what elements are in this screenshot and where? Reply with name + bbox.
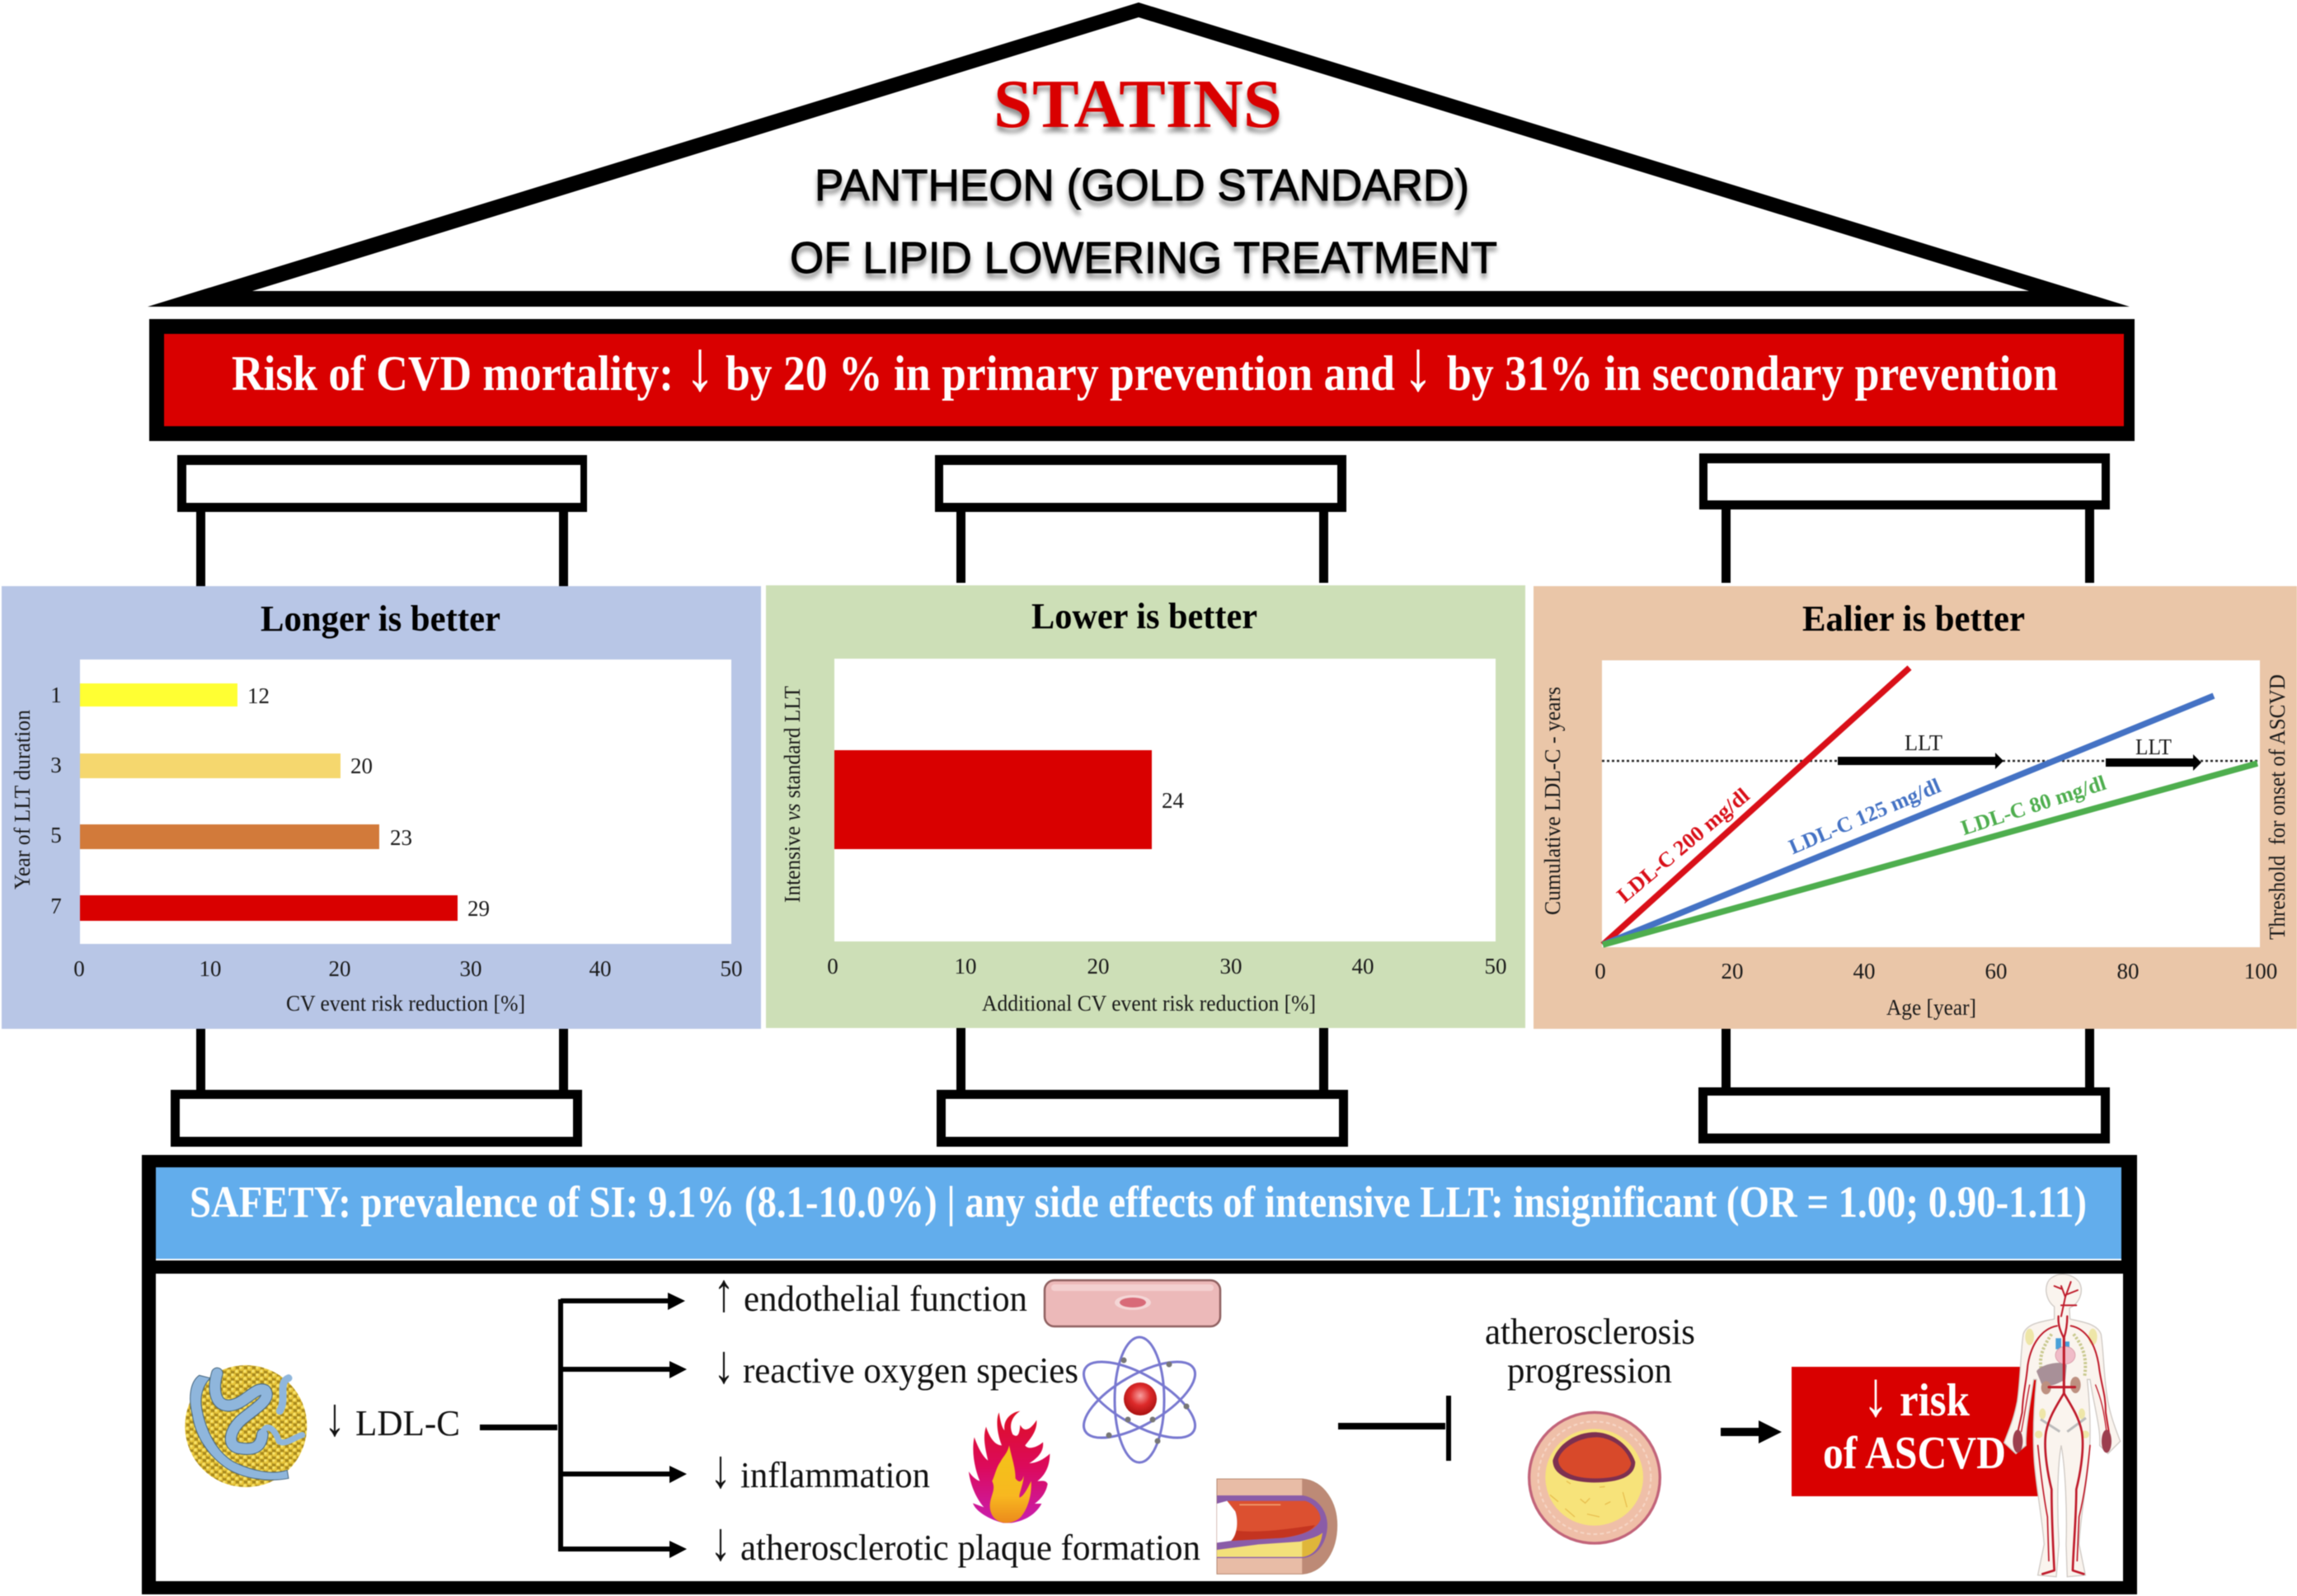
column middle: base xyxy=(937,1028,1348,1147)
panel: lower is better xyxy=(766,585,1525,1028)
bar chart: intensive vs standard: Intensive vs standard LLT xyxy=(780,686,805,903)
line chart: cumulative LDL-C: LDL-C 200 mg/dl xyxy=(1613,783,1754,908)
bar chart: intensive vs standard: 24 xyxy=(1162,788,1184,813)
text: reactive oxygen species: ↓ xyxy=(713,1335,735,1395)
bar chart: LLT duration: 40 xyxy=(589,956,612,981)
line chart: cumulative LDL-C: LDL-C 80 mg/dl xyxy=(1958,771,2109,840)
bar chart: intensive vs standard xyxy=(780,659,1507,1016)
text: endothelial function: endothelial function xyxy=(744,1279,1027,1319)
bar chart: LLT duration: 20 xyxy=(350,753,373,778)
column right: capital and shaft xyxy=(1699,453,2110,583)
callout: risk of ASCVD xyxy=(1792,1359,2038,1496)
line chart: cumulative LDL-C: Threshold for onset of ASCVD xyxy=(2265,674,2290,940)
bar chart: LLT duration: 50 xyxy=(721,956,742,981)
heading: earlier: Ealier is better xyxy=(1802,598,2025,639)
line chart: cumulative LDL-C: 0 xyxy=(1595,959,1606,983)
text: atherosclerotic plaque formation: ↓ xyxy=(710,1512,731,1572)
bar chart: intensive vs standard: 20 xyxy=(1087,954,1110,979)
arrows: branching from LDL-C xyxy=(480,1293,687,1558)
callout: risk of ASCVD: of ASCVD xyxy=(1823,1428,2006,1479)
bar chart: intensive vs standard: 30 xyxy=(1220,954,1242,979)
banner: CVD mortality: Risk of CVD mortality: xyxy=(232,346,674,401)
heading: longer: Longer is better xyxy=(261,598,500,639)
bar chart: intensive vs standard: 50 xyxy=(1484,954,1507,979)
bar chart: LLT duration: 29 xyxy=(467,896,490,921)
text: endothelial function xyxy=(713,1263,1027,1323)
inhibition symbol xyxy=(1338,1396,1451,1461)
icon: atom xyxy=(1073,1337,1206,1462)
text: atherosclerosis progression: atherosclerosis xyxy=(1485,1312,1695,1352)
banner: CVD mortality xyxy=(164,326,2124,426)
line chart: cumulative LDL-C: 40 xyxy=(1853,959,1875,983)
bar chart: LLT duration: 0 xyxy=(73,956,85,981)
bar chart: LLT duration xyxy=(10,660,742,1016)
panel: earlier is better xyxy=(1534,586,2297,1029)
text: inflammation: ↓ xyxy=(710,1439,731,1500)
foundation frame xyxy=(142,1155,2137,1594)
text: LDL-C: ↓ xyxy=(324,1387,345,1448)
line chart: cumulative LDL-C: LDL-C 125 mg/dl xyxy=(1785,773,1944,859)
column left: capital and shaft xyxy=(177,455,587,588)
line chart: cumulative LDL-C: Age [year] xyxy=(1886,995,1976,1020)
mechanism panel background xyxy=(156,1274,2123,1581)
bar chart: LLT duration: 30 xyxy=(460,956,481,981)
column middle: capital and shaft xyxy=(935,455,1346,583)
banner: safety xyxy=(156,1167,2121,1260)
arrow: to risk xyxy=(1721,1420,1782,1443)
bar chart: intensive vs standard: 10 xyxy=(955,954,976,979)
column right: base xyxy=(1698,1029,2110,1143)
beam frame xyxy=(149,319,2135,441)
line chart: cumulative LDL-C xyxy=(1540,660,2290,1020)
banner: CVD mortality: ↓ xyxy=(684,326,716,406)
text: inflammation xyxy=(710,1439,930,1500)
icon: human body vascular system xyxy=(2004,1274,2121,1577)
bar chart: LLT duration: 10 xyxy=(200,956,221,981)
icon: endothelial cell xyxy=(1045,1280,1220,1326)
icon: artery with plaque xyxy=(1217,1479,1337,1574)
callout: risk of ASCVD: risk xyxy=(1900,1375,1971,1426)
line chart: cumulative LDL-C: Cumulative LDL-C - years xyxy=(1540,687,1565,915)
text: reactive oxygen species xyxy=(713,1335,1078,1395)
text: inflammation: inflammation xyxy=(740,1455,930,1495)
column left: base xyxy=(171,1029,582,1147)
text: reactive oxygen species: reactive oxygen species xyxy=(743,1350,1078,1391)
title: statins: STATINS xyxy=(993,66,1282,143)
text: LDL-C: LDL-C xyxy=(355,1403,460,1443)
text: endothelial function: ↑ xyxy=(713,1263,735,1323)
line chart: cumulative LDL-C: 20 xyxy=(1722,959,1743,983)
bar chart: LLT duration: 23 xyxy=(390,825,412,850)
panel: longer is better xyxy=(2,586,761,1029)
pediment roof xyxy=(148,2,2130,307)
subtitle: PANTHEON (GOLD STANDARD) xyxy=(815,161,1469,210)
bar chart: LLT duration: 3 xyxy=(50,753,62,777)
icon: flame xyxy=(969,1411,1050,1523)
text: LDL-C xyxy=(324,1387,460,1448)
text: atherosclerosis progression xyxy=(1485,1312,1695,1391)
heading: lower: Lower is better xyxy=(1031,596,1257,636)
bar chart: LLT duration: 7 xyxy=(50,894,62,918)
icon: artery cross-section xyxy=(1529,1412,1660,1543)
bar chart: LLT duration: CV event risk reduction [%] xyxy=(286,991,525,1016)
line chart: cumulative LDL-C: LLT xyxy=(1905,730,1942,755)
bar chart: LLT duration: 5 xyxy=(50,823,62,847)
bar chart: LLT duration: 12 xyxy=(247,683,270,708)
line chart: cumulative LDL-C: 60 xyxy=(1985,959,2007,983)
subtitle: OF LIPID LOWERING TREATMENT xyxy=(790,233,1497,283)
line chart: cumulative LDL-C: 80 xyxy=(2117,959,2139,983)
bar chart: intensive vs standard: 40 xyxy=(1352,954,1374,979)
text: atherosclerosis progression: progression xyxy=(1507,1350,1672,1391)
bar chart: intensive vs standard: Additional CV event risk reduction [%] xyxy=(982,991,1316,1016)
banner: CVD mortality: by 31% in secondary prevention xyxy=(1447,346,2058,401)
bar chart: LLT duration: 1 xyxy=(50,683,62,707)
line chart: cumulative LDL-C: 100 xyxy=(2244,959,2277,983)
banner: CVD mortality: ↓ xyxy=(1402,326,1434,406)
banner: CVD mortality: by 20 % in primary prevention and xyxy=(726,346,1395,401)
line chart: cumulative LDL-C: LLT xyxy=(2135,735,2172,759)
bar chart: LLT duration: Year of LLT duration xyxy=(10,710,35,890)
text: atherosclerotic plaque formation xyxy=(710,1512,1200,1572)
bar chart: LLT duration: 20 xyxy=(328,956,351,981)
callout: risk of ASCVD: ↓ xyxy=(1862,1359,1889,1430)
bar chart: intensive vs standard: 0 xyxy=(827,954,838,979)
subtitle xyxy=(790,161,1497,283)
text: atherosclerotic plaque formation: atherosclerotic plaque formation xyxy=(740,1528,1200,1568)
icon: LDL particle xyxy=(185,1365,307,1487)
